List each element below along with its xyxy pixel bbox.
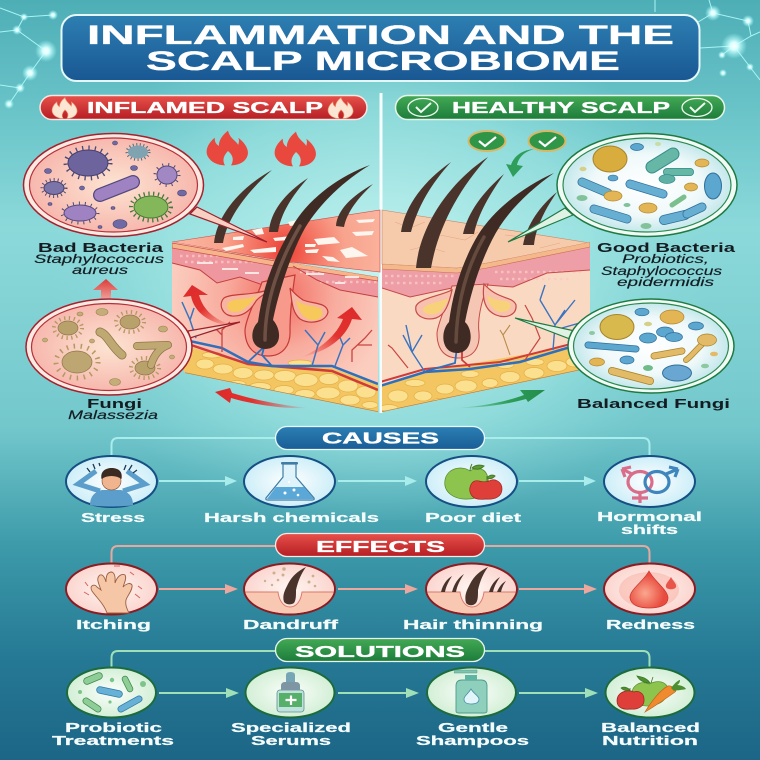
label: Stress [81, 511, 145, 525]
label: Balanced [601, 721, 700, 735]
epidermis band [382, 246, 590, 297]
heading: inflamed scalp: INFLAMED SCALP [87, 100, 323, 117]
callout: bad bacteria [24, 134, 267, 242]
label: bad bacteria [34, 241, 165, 277]
hair: left [214, 170, 373, 243]
pointer [508, 208, 573, 242]
heading: causes [276, 426, 484, 450]
arrow: up to bad bacteria [93, 279, 118, 298]
section: solutions [52, 638, 700, 748]
gland left [221, 290, 268, 316]
heading: inflamed scalp [40, 96, 367, 120]
heading: solutions: SOLUTIONS [295, 644, 465, 661]
top surface [382, 210, 590, 268]
lens [568, 299, 734, 393]
microbes [588, 308, 718, 381]
check badges above healthy scalp [468, 131, 566, 177]
pointer [188, 322, 240, 338]
icon: probiotic [67, 668, 156, 718]
label: Treatments [52, 734, 174, 748]
arrow: green down [506, 149, 534, 177]
follicle [437, 284, 488, 358]
network decoration: top left [0, 8, 58, 109]
pointer [515, 318, 575, 339]
lens [557, 134, 737, 236]
dermis [170, 240, 380, 415]
icon: check left [408, 98, 438, 116]
flames above inflamed scalp [207, 131, 316, 166]
connector [112, 651, 650, 667]
arrow: red left [215, 388, 308, 408]
icon: shampoo [427, 668, 516, 718]
label: Hair thinning [403, 618, 543, 632]
label: Gentle [438, 721, 508, 735]
label [52, 721, 174, 748]
connector [112, 546, 650, 563]
label: balanced fungi: Balanced Fungi [577, 397, 730, 411]
lens [26, 299, 192, 395]
label: good bacteria [597, 241, 737, 289]
arrows [159, 476, 596, 486]
icon: check badge [528, 131, 566, 151]
label [601, 721, 700, 748]
callout: good bacteria [508, 134, 737, 242]
lens [24, 134, 204, 236]
top surface [172, 210, 380, 272]
label: Poor diet [425, 511, 522, 525]
icon: hair thinning [420, 564, 522, 616]
fat layer [184, 348, 378, 412]
heading: healthy scalp: HEALTHY SCALP [452, 100, 670, 117]
fungi [42, 308, 174, 386]
center divider [380, 93, 382, 413]
label: Nutrition [602, 734, 698, 748]
icon: flame [207, 131, 248, 165]
label [416, 721, 529, 748]
arrow: green right [453, 390, 545, 408]
label: Serums [251, 734, 331, 748]
arrow: red up left [183, 285, 232, 325]
label: fungi [68, 397, 158, 422]
label: Itching [76, 618, 151, 632]
title: SCALP MICROBIOME [146, 46, 620, 76]
heading: causes: CAUSES [322, 430, 439, 448]
heading: solutions [276, 638, 484, 662]
hair: main left [252, 165, 370, 349]
label [231, 721, 351, 748]
callout: fungi [26, 299, 240, 395]
pointer [190, 207, 267, 242]
icon: flask [244, 456, 335, 507]
label: shifts [621, 523, 678, 537]
label: fungi: Malassezia [68, 408, 158, 422]
label: Dandruff [243, 618, 340, 632]
section: effects [66, 534, 695, 632]
network decoration: top right [655, 0, 760, 80]
follicle roots [423, 347, 457, 372]
label: bad bacteria: Staphylococcus [34, 252, 164, 266]
label [597, 510, 702, 537]
icon: flame [275, 132, 316, 166]
label: good bacteria: Probiotics, [622, 252, 709, 266]
connector [112, 438, 650, 456]
gland right [483, 284, 516, 317]
hair: right [401, 157, 557, 268]
arrow: red up right [302, 307, 362, 357]
flakes [222, 219, 375, 262]
label: Specialized [231, 721, 351, 735]
icon: dandruff [240, 564, 340, 616]
title [62, 15, 700, 81]
callout: balanced fungi [515, 299, 734, 393]
label: fungi: Fungi [87, 397, 142, 411]
label: good bacteria: Good Bacteria [597, 241, 737, 255]
icon: stress [66, 456, 157, 507]
icon: itching hand [66, 564, 157, 614]
inflamed skin block [165, 210, 380, 415]
icon: check badge [468, 131, 506, 151]
label: Hormonal [597, 510, 702, 524]
icon: serum [246, 668, 334, 718]
arrows [159, 584, 597, 594]
vessels [382, 344, 568, 382]
label: Redness [606, 618, 695, 632]
healthy skin block [380, 210, 592, 415]
heading: effects [276, 534, 484, 556]
label: Shampoos [416, 734, 529, 748]
microbes [42, 141, 186, 228]
icon: flame right [328, 97, 353, 119]
heading: healthy scalp [396, 96, 724, 120]
follicle [245, 275, 295, 356]
gland left [416, 290, 452, 319]
fat layer [380, 345, 592, 412]
label: good bacteria: epidermidis [617, 275, 714, 289]
label: bad bacteria: aureus [72, 263, 128, 277]
gland right [290, 288, 328, 322]
icon: balanced nutrition [606, 668, 694, 718]
label: Harsh chemicals [204, 511, 379, 525]
label: bad bacteria: Bad Bacteria [38, 241, 165, 255]
icon: hormones [604, 456, 695, 507]
vessels [185, 343, 378, 390]
icon: redness [604, 564, 695, 614]
skin cross-section [165, 157, 592, 415]
arrows [159, 688, 598, 698]
hair roots [248, 344, 272, 366]
section: causes [66, 426, 702, 537]
icon: flame left [52, 97, 77, 119]
heading: effects: EFFECTS [316, 539, 445, 556]
title: INFLAMMATION AND THE [87, 20, 674, 50]
hair: main right [443, 173, 554, 353]
icon: apples [426, 456, 517, 507]
label: Probiotic [65, 721, 162, 735]
label: good bacteria: Staphylococcus [601, 264, 722, 278]
icon: check right [682, 98, 712, 116]
microbes [576, 142, 722, 229]
